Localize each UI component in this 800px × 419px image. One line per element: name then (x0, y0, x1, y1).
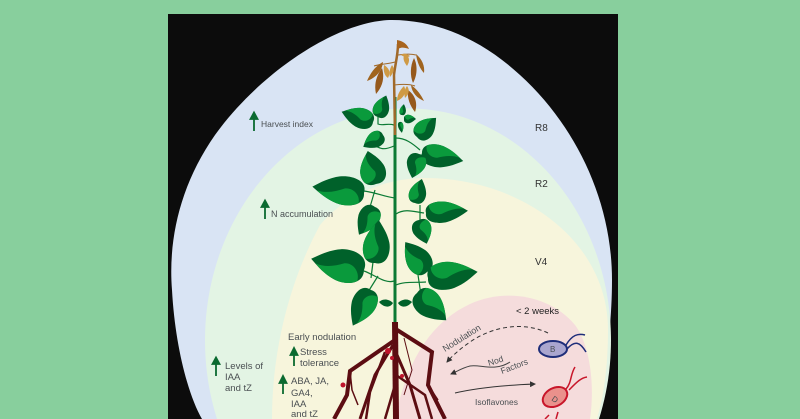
stage zone: V4 cream (272, 178, 608, 419)
N accumulation note (262, 200, 333, 219)
levels note: and tZ (225, 383, 252, 394)
hormones note: ABA, JA, (291, 376, 329, 387)
petioles (364, 116, 426, 295)
harvest index note (250, 112, 314, 131)
bacterium B (539, 334, 586, 357)
root nodules (340, 348, 404, 388)
levels note: IAA (225, 372, 241, 383)
nod label: Nod (487, 353, 505, 368)
bacterium D: D (550, 394, 560, 405)
bacterium B: B (550, 345, 555, 354)
bacterium D (539, 367, 587, 411)
stress tolerance note (290, 347, 339, 369)
partial bacterium (545, 412, 558, 419)
duration label: < 2 weeks (516, 306, 559, 317)
zone: early nodulation pink (395, 296, 592, 419)
factors label: Factors (499, 356, 529, 376)
levels note: Levels of (225, 361, 263, 372)
stress tolerance note: Stress (300, 347, 327, 358)
N accumulation note: N accumulation (271, 209, 333, 219)
upper dry stem (394, 44, 398, 135)
nod factors arrow (451, 362, 510, 374)
stage label V4: V4 (535, 257, 548, 268)
hormones note: IAA (291, 399, 307, 410)
stress tolerance note: tolerance (300, 358, 339, 369)
harvest index note: Harvest index (261, 119, 314, 129)
isoflavones arrow (455, 384, 535, 393)
hormones note: GA4, (291, 388, 313, 399)
roots (334, 322, 445, 419)
nodulation label: Nodulation (441, 322, 483, 354)
early nodulation label: Early nodulation (288, 332, 356, 343)
isoflavones label: Isoflavones (475, 397, 518, 407)
hormones note (280, 376, 329, 419)
leaves (308, 93, 479, 331)
dry pods (367, 40, 424, 112)
levels note (212, 358, 263, 394)
stage label R8: R8 (535, 123, 548, 134)
stage label R2: R2 (535, 179, 548, 190)
main stem (394, 97, 396, 322)
stage zone: R8 blue (171, 20, 612, 419)
stage zone: R2 mint (205, 108, 611, 419)
nodulation dashed arrow (447, 327, 548, 362)
black panel (168, 14, 618, 419)
